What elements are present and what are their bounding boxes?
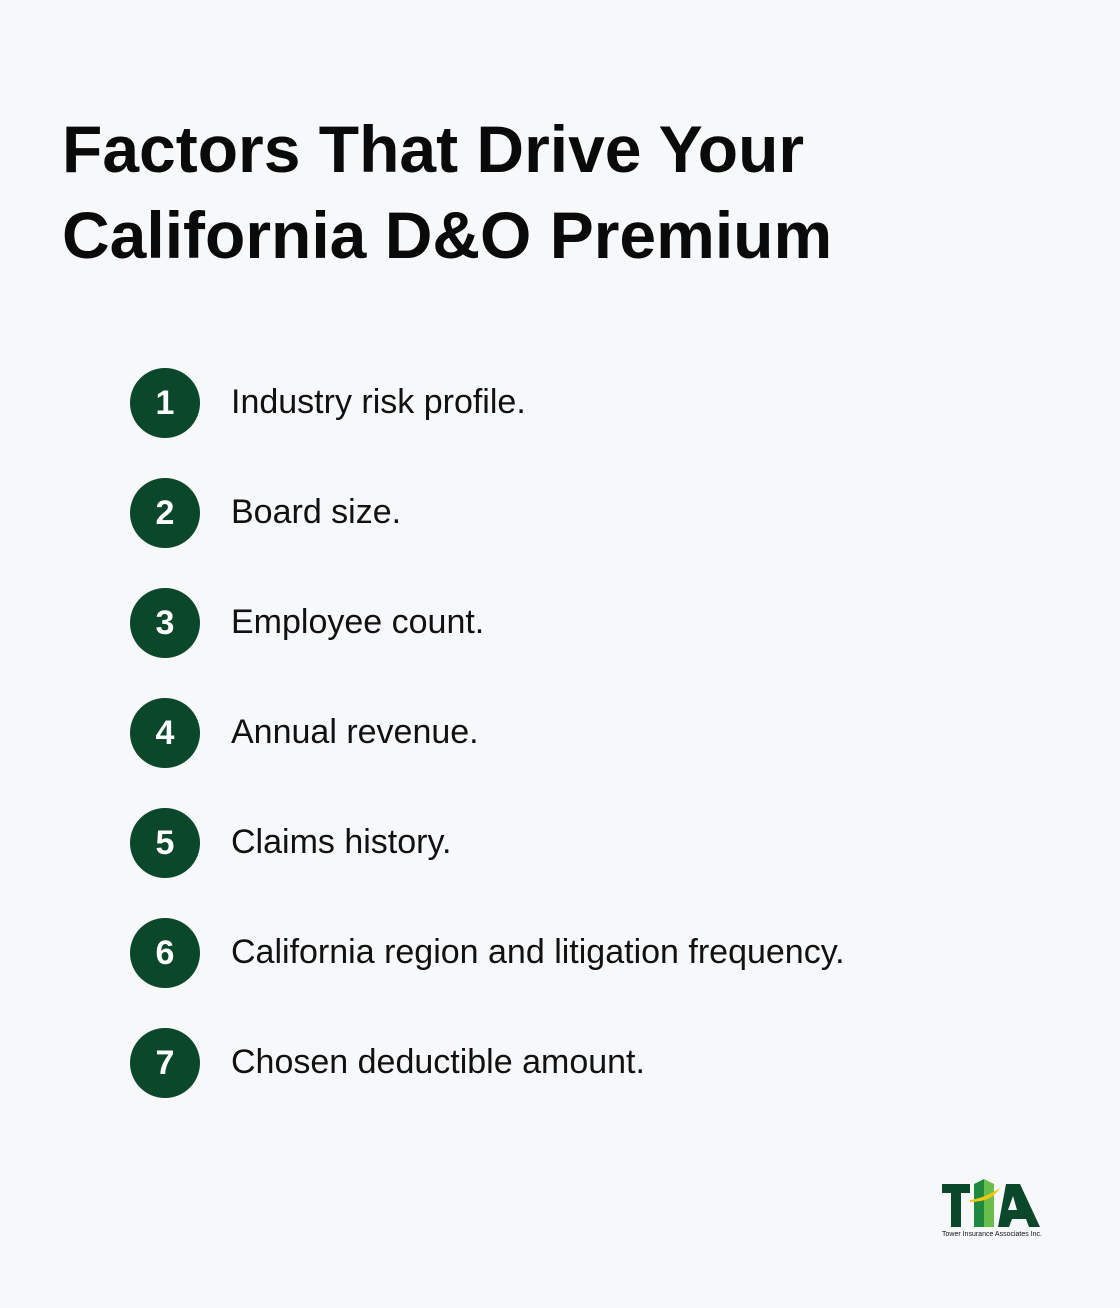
item 4 <box>130 698 479 768</box>
item 3: 3 <box>156 604 174 642</box>
item 3: Employee count. <box>231 603 484 641</box>
item 6 <box>130 918 845 988</box>
item 2: 2 <box>156 494 174 532</box>
item 5: 5 <box>156 824 174 862</box>
item 3 <box>130 588 484 658</box>
item 2: Board size. <box>231 493 401 531</box>
item 4: 4 <box>156 714 174 752</box>
item 2 <box>130 478 401 548</box>
title: California D&O Premium <box>62 198 832 272</box>
item 7: 7 <box>156 1044 174 1082</box>
item 7: Chosen deductible amount. <box>231 1043 645 1081</box>
item 1 <box>130 368 526 438</box>
item 1: Industry risk profile. <box>231 383 526 421</box>
item 4: Annual revenue. <box>231 713 479 751</box>
title: Factors That Drive Your <box>62 112 804 186</box>
logo <box>942 1179 1042 1238</box>
item 1: 1 <box>156 384 174 422</box>
item 5 <box>130 808 451 878</box>
item 5: Claims history. <box>231 823 451 861</box>
item 7 <box>130 1028 645 1098</box>
logo: Tower Insurance Associates Inc. <box>942 1231 1042 1238</box>
item 6: California region and litigation frequency. <box>231 933 845 971</box>
title <box>62 112 832 272</box>
item 6: 6 <box>156 934 174 972</box>
